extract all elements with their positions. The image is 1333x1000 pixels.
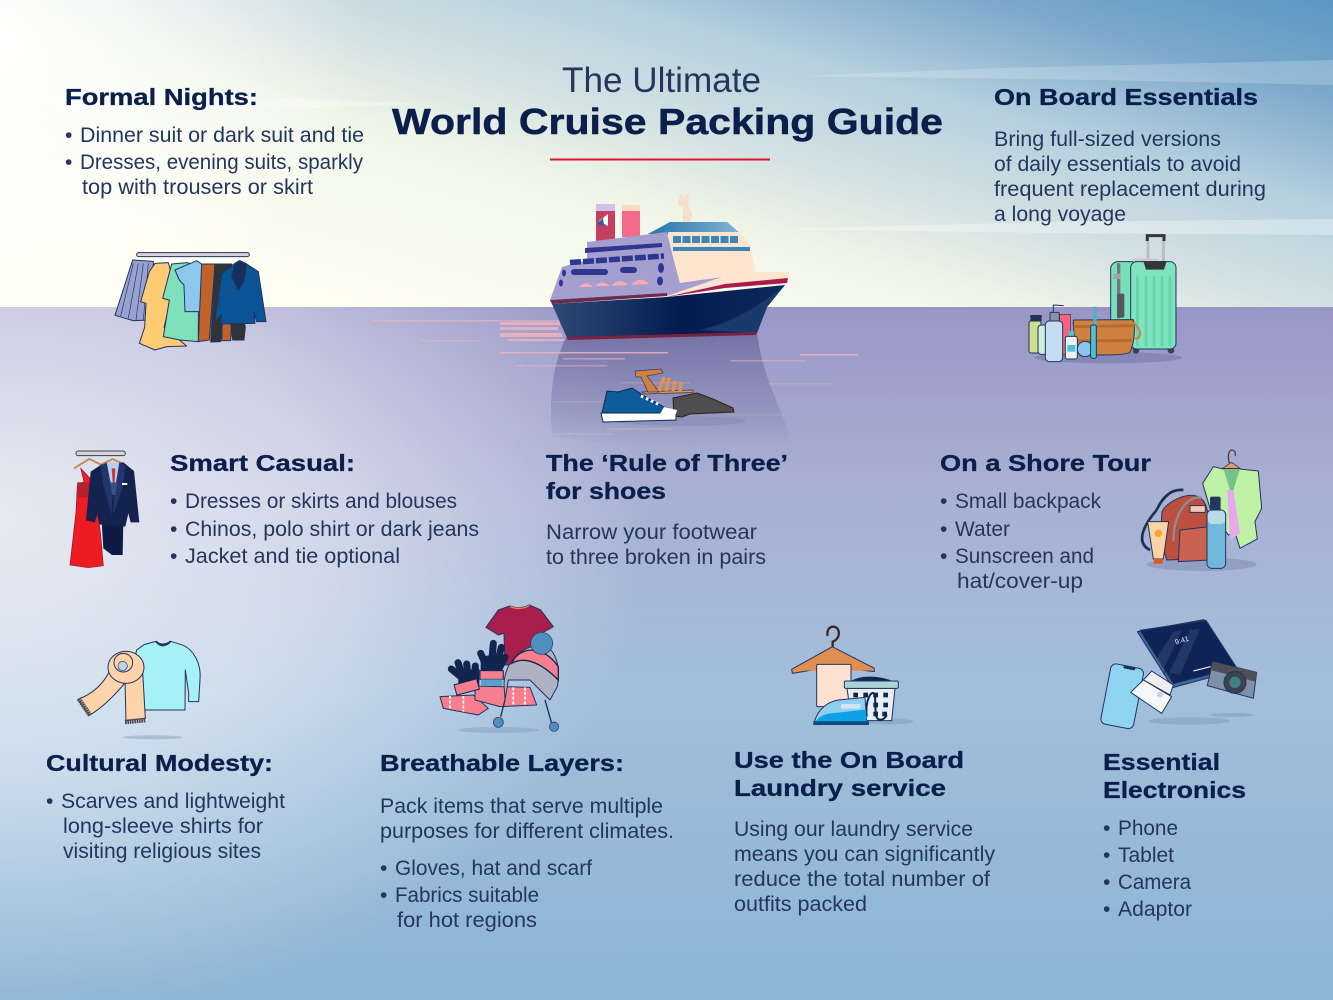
dome deck (648, 222, 741, 234)
panel: formal nights (65, 84, 364, 199)
bridge windows (673, 240, 750, 251)
heading: Smart Casual: (170, 450, 355, 476)
text block: Small backpack (955, 490, 1101, 513)
text block: Dinner suit or dark suit and tie (80, 124, 364, 147)
background: sea (0, 307, 1333, 1000)
dark trousers (211, 264, 245, 342)
icon: electronics (1100, 620, 1257, 730)
green dress (163, 263, 200, 342)
text block: to three broken in pairs (546, 546, 766, 569)
suit jacket (86, 462, 139, 527)
hat (493, 632, 559, 731)
hull (552, 285, 785, 338)
rail (76, 451, 125, 456)
scarf (440, 686, 537, 715)
gloves (451, 643, 505, 695)
cream upper decks (667, 232, 790, 296)
text block: • (46, 790, 53, 813)
panel: breathable layers (380, 750, 674, 932)
red dress (70, 468, 103, 568)
pink tube (1059, 314, 1071, 354)
small bottle (1038, 325, 1048, 354)
lifeboats (579, 280, 649, 287)
text block: • (940, 518, 947, 541)
bullet list: • (380, 857, 387, 880)
sunscreen (1148, 522, 1169, 564)
lapels, shirt and tie (101, 462, 127, 515)
lavender superstructure (550, 232, 722, 304)
shadow (614, 416, 746, 426)
heading: Use the On Board (734, 747, 964, 773)
text block: Using our laundry service (734, 818, 973, 841)
scarf knot (108, 651, 144, 683)
rail (137, 253, 249, 257)
bullet list: Gloves, hat and scarf (395, 857, 592, 880)
text block: • (940, 545, 947, 568)
phone (1100, 663, 1144, 730)
heading (546, 450, 788, 504)
text block: a long voyage (994, 203, 1126, 226)
icon: laundry (792, 627, 913, 725)
mast (678, 194, 692, 222)
windows (559, 243, 664, 286)
heading: Laundry service (734, 775, 946, 801)
bullet list: • (380, 884, 387, 907)
suitcase handle (1147, 236, 1164, 262)
title line 2: World Cruise Packing Guide (392, 101, 943, 142)
panel: on a shore tour (940, 450, 1151, 593)
text block: of daily essentials to avoid (994, 153, 1241, 176)
bullet list: • (1103, 844, 1110, 867)
scarf end right (125, 672, 145, 722)
text block: Sunscreen and (955, 545, 1094, 568)
bottle left (1029, 315, 1042, 353)
iron (813, 697, 869, 725)
text block: frequent replacement during (994, 178, 1266, 201)
text block: long-sleeve shirts for (63, 815, 263, 838)
text block: • (65, 124, 72, 147)
text block: • (170, 518, 177, 541)
text block: • (940, 490, 947, 513)
bullet list: for hot regions (397, 909, 537, 932)
tablet (1137, 620, 1237, 688)
icon: suitcase and toiletries (1029, 236, 1182, 363)
jumper (133, 641, 200, 710)
panel: rule of three (546, 450, 788, 569)
shadow (458, 727, 539, 733)
text block: Jacket and tie optional (185, 545, 400, 568)
heading: Breathable Layers: (380, 750, 624, 776)
scarf end left (78, 672, 127, 715)
t-shirt (486, 605, 553, 665)
text block: top with trousers or skirt (82, 176, 313, 199)
bullet list (380, 857, 592, 932)
bullet list: • (1103, 871, 1110, 894)
dress bodice (77, 482, 95, 497)
blue shirt (175, 261, 202, 312)
navy jacket (215, 261, 266, 324)
funnel 1 (596, 204, 615, 241)
text block (940, 490, 1101, 593)
heading: On a Shore Tour (940, 450, 1151, 476)
towel (817, 664, 851, 707)
title line 1: The Ultimate (562, 61, 761, 100)
panel: on board essentials (994, 84, 1266, 226)
icon: backpack, bottle, sunscreen, cover-up (1142, 450, 1262, 571)
text block: reduce the total number of (734, 868, 990, 891)
background: sky (0, 0, 1333, 308)
hangers (74, 459, 125, 468)
intro text (380, 795, 674, 843)
text block (46, 790, 285, 863)
intro text: purposes for different climates. (380, 820, 674, 843)
bullet list: Camera (1118, 871, 1191, 894)
panel: smart casual (170, 450, 479, 568)
panel: cultural modesty (46, 750, 285, 863)
text block: Scarves and lightweight (61, 790, 285, 813)
heading: for shoes (546, 478, 666, 504)
cover-up on hanger (1203, 450, 1262, 548)
heading (734, 747, 964, 801)
ship reflection (551, 334, 788, 446)
heading: Cultural Modesty: (46, 750, 273, 776)
icon: winter layers (440, 605, 559, 733)
wash bag (1073, 320, 1140, 355)
red divider (550, 158, 770, 160)
cruise ship (550, 194, 790, 340)
skirt (115, 260, 153, 321)
heading (1103, 749, 1246, 803)
suit trousers (102, 522, 123, 555)
backpack straps (1142, 490, 1183, 550)
text block (546, 521, 766, 569)
pump bottle (1045, 305, 1063, 362)
toothbrush (1091, 307, 1097, 358)
text block: • (170, 545, 177, 568)
heading: Essential (1103, 749, 1220, 775)
camera (1207, 662, 1257, 698)
text block (734, 818, 995, 916)
pink water streaks (372, 320, 858, 435)
funnel 2 (622, 205, 640, 237)
heading: The ‘Rule of Three’ (546, 450, 788, 476)
bullet list: • (1103, 898, 1110, 921)
icon: clothes rail (115, 253, 266, 350)
dark shoe (673, 393, 734, 417)
text block: visiting religious sites (63, 840, 261, 863)
laundry basket (844, 677, 898, 721)
heading: Formal Nights: (65, 84, 258, 110)
shadow (1034, 352, 1182, 363)
bullet list: • (1103, 817, 1110, 840)
bullet list (1103, 817, 1192, 921)
icon: scarf and jumper (78, 641, 200, 739)
text block: Water (955, 518, 1010, 541)
shadow (123, 735, 183, 739)
text block: Dresses or skirts and blouses (185, 490, 457, 513)
orange trousers (198, 264, 232, 342)
bottle (1207, 497, 1226, 568)
bullet list: Phone (1118, 817, 1178, 840)
text block (65, 124, 364, 199)
text block: Bring full-sized versions (994, 128, 1221, 151)
text block: Chinos, polo shirt or dark jeans (185, 518, 479, 541)
sneaker (601, 388, 677, 422)
title (392, 61, 943, 160)
bullet list: Tablet (1118, 844, 1174, 867)
intro text: Pack items that serve multiple (380, 795, 663, 818)
bullet list: Fabrics suitable (395, 884, 539, 907)
text block: outfits packed (734, 893, 867, 916)
suitcase (1111, 258, 1176, 354)
text block (994, 128, 1266, 226)
heading: Electronics (1103, 777, 1246, 803)
panel: laundry service (734, 747, 995, 916)
bow highlight (700, 285, 785, 333)
icon: dress and suit (70, 451, 139, 568)
small blue bottle (1065, 331, 1077, 359)
bullet list: Adaptor (1118, 898, 1192, 921)
shadow (863, 718, 913, 724)
text block: means you can significantly (734, 843, 995, 866)
hanger (792, 627, 874, 673)
shoes icon (601, 369, 746, 426)
hull stripes (550, 278, 788, 340)
shadow (1147, 558, 1257, 571)
yellow dress (139, 263, 187, 350)
heading: On Board Essentials (994, 84, 1258, 110)
sponge (1077, 341, 1093, 357)
sandal (635, 369, 693, 394)
text block: • (170, 490, 177, 513)
tablet: 9:41 (1174, 634, 1190, 647)
shadows (1148, 713, 1253, 725)
text block: Narrow your footwear (546, 521, 757, 544)
backpack (1161, 495, 1210, 562)
adaptor (1131, 669, 1173, 713)
text block: hat/cover-up (957, 570, 1083, 593)
text block (170, 490, 479, 568)
panel: essential electronics (1103, 749, 1246, 921)
text block: Dresses, evening suits, sparkly (80, 151, 363, 174)
text block: • (65, 151, 72, 174)
iron cord (866, 693, 887, 720)
